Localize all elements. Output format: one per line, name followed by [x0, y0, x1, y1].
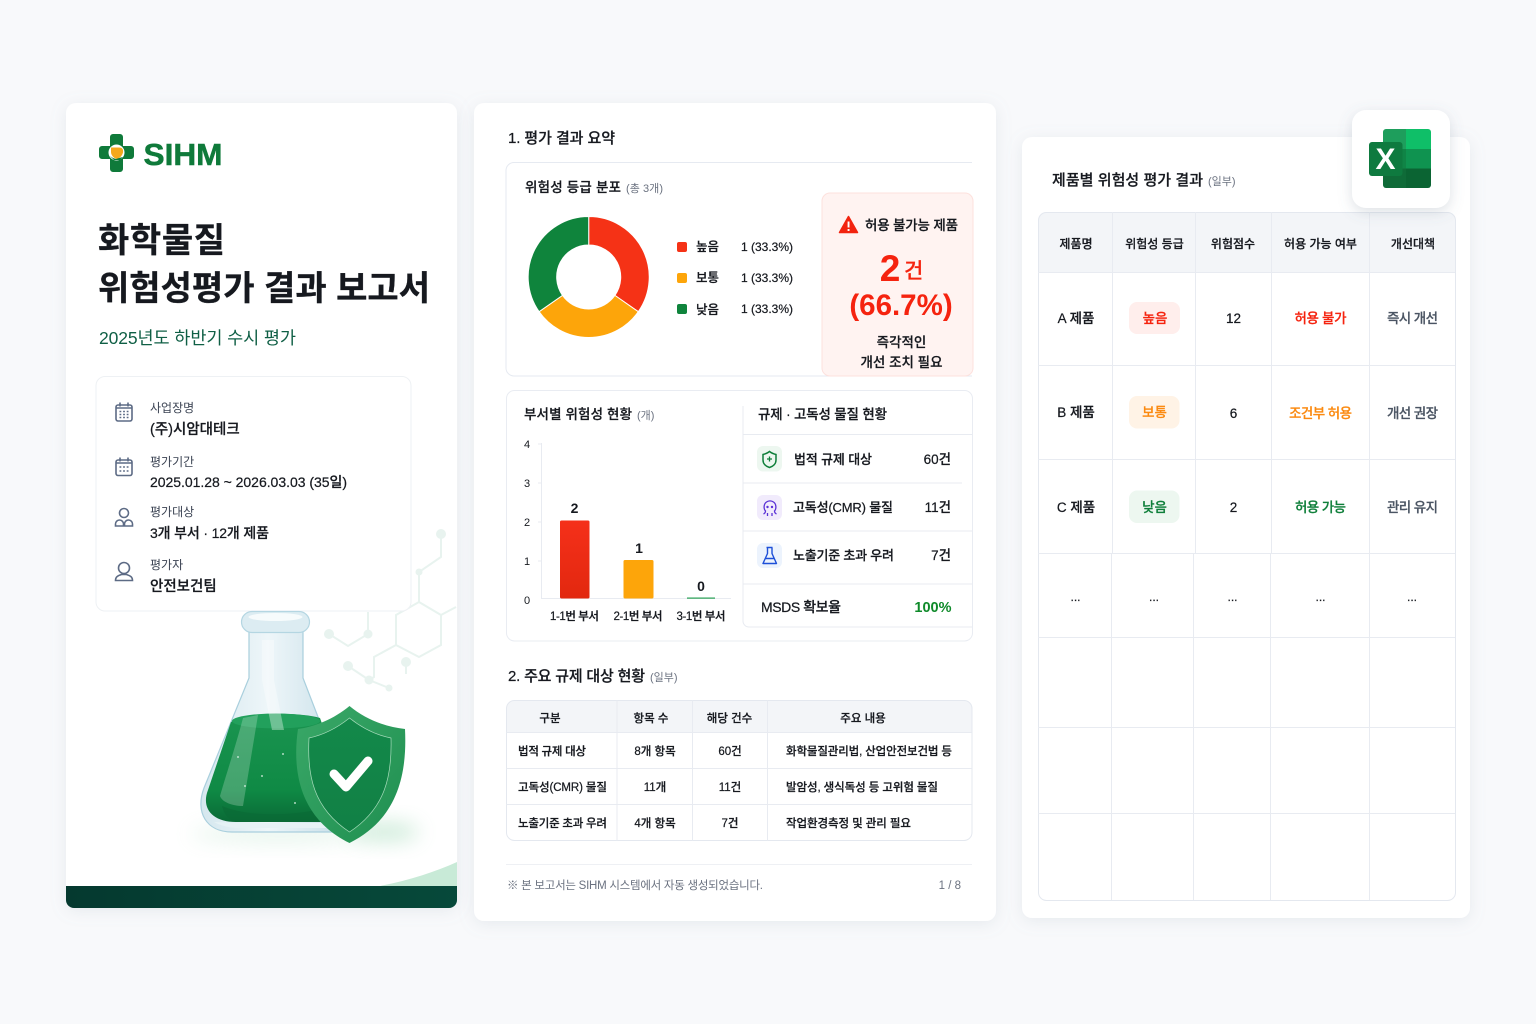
field: target: 평가대상 — [150, 505, 194, 519]
field: company — [150, 401, 240, 438]
icon: company — [116, 402, 132, 421]
table header: 제품명 — [1059, 237, 1093, 251]
row: product C: 낮음 — [1142, 500, 1167, 515]
field: period: 2025.01.28 ~ 2026.03.03 (35일) — [150, 474, 347, 490]
row: CMR substances: 고독성(CMR) 물질 — [793, 500, 893, 515]
legend: 1 (33.3%) — [741, 302, 793, 316]
field: evaluator: 안전보건팀 — [150, 578, 217, 595]
row: legally regulated: 60건 — [924, 452, 951, 467]
table header: 주요 내용 — [840, 712, 886, 725]
callout: not acceptable products: 허용 불가능 제품 — [865, 218, 958, 233]
row: ellipsis: ... — [1070, 590, 1081, 604]
logo: SIHM: SIHM — [144, 137, 222, 172]
row: CMR: 11개 — [644, 780, 666, 794]
row: product C: C 제품 — [1057, 500, 1095, 515]
legend: 1 (33.3%) — [741, 240, 793, 254]
row: product B: 조건부 허용 — [1289, 406, 1352, 421]
panel: regulated and toxic substances: 규제 · 고독성 물질 현황 — [758, 407, 887, 422]
field: period: 평가기간 — [150, 455, 194, 469]
table: product results — [1038, 212, 1456, 900]
row: product B: 6 — [1230, 406, 1237, 421]
table header: 허용 가능 여부 — [1284, 237, 1357, 251]
row: product C: 관리 유지 — [1387, 500, 1438, 515]
donut chart — [528, 216, 649, 338]
shield — [296, 706, 405, 843]
row: CMR substances — [757, 495, 951, 520]
chart heading: 부서별 위험성 현황 — [524, 407, 632, 422]
bar chart: 4 — [524, 439, 530, 451]
heading: section 1: 1. 평가 결과 요약 — [508, 130, 615, 147]
row: legally regulated — [757, 446, 951, 472]
panel: regulated and toxic substances — [743, 406, 972, 627]
row: exposure: 작업환경측정 및 관리 필요 — [786, 817, 911, 830]
icon: period — [116, 458, 132, 476]
row: CMR — [518, 780, 938, 794]
bar chart — [524, 439, 731, 623]
row: exposure: 7건 — [722, 817, 738, 830]
panel: department and regulation status — [506, 390, 972, 641]
subtitle: 2025년도 하반기 수시 평가 — [99, 328, 296, 348]
panel: product risk results — [1022, 137, 1470, 918]
check mark — [334, 761, 368, 787]
chart heading: 위험성 등급 분포 — [525, 180, 621, 195]
callout: not acceptable products: 건 — [904, 260, 923, 283]
row: exposure — [518, 816, 911, 830]
footer band — [66, 862, 457, 908]
footer note: 1 / 8 — [939, 880, 961, 892]
flask — [201, 612, 350, 832]
callout: not acceptable products: 개선 조치 필요 — [860, 355, 943, 370]
field: company: (주)시암대테크 — [150, 421, 240, 438]
row: ellipsis: ... — [1149, 590, 1159, 604]
row: exposure: 4개 항목 — [634, 816, 676, 830]
bar chart: 1 — [524, 556, 530, 568]
table header: 해당 건수 — [707, 712, 753, 725]
logo: SIHM — [99, 134, 222, 172]
footer note — [506, 864, 972, 892]
bar chart: 1-1번 부서 — [550, 610, 599, 623]
panel: summary report page — [474, 103, 996, 921]
row: product C: 허용 가능 — [1295, 500, 1346, 515]
bar chart: 2 — [524, 517, 530, 529]
field: evaluator — [150, 558, 217, 595]
row: legal — [518, 744, 952, 758]
table header: 항목 수 — [634, 712, 669, 725]
field: evaluator: 평가자 — [150, 558, 183, 572]
heading: section 2: 2. 주요 규제 대상 현황 — [508, 668, 645, 685]
row: product A: 높음 — [1143, 311, 1167, 326]
row: product C: 2 — [1230, 500, 1237, 515]
row: product A — [1058, 302, 1438, 334]
legend — [677, 240, 793, 317]
callout: not acceptable products: 즉각적인 — [877, 335, 926, 350]
illustration: flask and shield — [190, 612, 419, 843]
bar chart: 1 — [635, 540, 643, 556]
bar chart: 2-1번 부서 — [614, 610, 662, 623]
row: CMR: 11건 — [719, 781, 741, 794]
row: product C — [1057, 490, 1438, 523]
field: target — [150, 505, 269, 541]
row: MSDS rate: MSDS 확보율 — [761, 599, 841, 615]
row: legal: 법적 규제 대상 — [518, 744, 586, 758]
legend: 높음 — [696, 240, 719, 254]
legend: 보통 — [696, 271, 719, 285]
row: exposure limit: 7건 — [931, 548, 951, 563]
callout: not acceptable products: 2 — [880, 248, 900, 289]
heading: section 2: (일부) — [650, 670, 678, 684]
title — [98, 222, 430, 308]
table header — [539, 712, 886, 725]
row: CMR substances: 11건 — [925, 500, 951, 515]
icon: Excel: X — [1375, 143, 1396, 176]
row: product A: 즉시 개선 — [1387, 311, 1438, 326]
row: product A: A 제품 — [1058, 311, 1094, 326]
row: legal: 화학물질관리법, 산업안전보건법 등 — [786, 745, 952, 758]
chart heading: (개) — [637, 409, 654, 422]
icon: target — [116, 508, 132, 526]
callout: not acceptable products: (66.7%) — [849, 289, 953, 322]
table header: 구분 — [539, 712, 561, 725]
row: product A: 허용 불가 — [1294, 311, 1347, 326]
title: 화학물질 — [98, 222, 225, 260]
row: product A: 12 — [1226, 311, 1241, 326]
table header: 개선대책 — [1391, 236, 1435, 251]
row: product B: 개선 권장 — [1387, 406, 1438, 421]
icon: warning — [840, 216, 858, 232]
row: CMR: 발암성, 생식독성 등 고위험 물질 — [786, 780, 938, 794]
bar chart: 3-1번 부서 — [676, 610, 726, 623]
molecule pattern — [324, 529, 456, 692]
icon: evaluator — [116, 562, 132, 580]
legend: 낮음 — [696, 303, 719, 317]
bar chart: 0 — [697, 578, 705, 594]
chart heading: (총 3개) — [626, 182, 663, 195]
table header: 위험성 등급 — [1125, 236, 1184, 251]
panel: risk grade distribution — [506, 162, 973, 376]
row: product B: 보통 — [1142, 405, 1167, 420]
bar chart: 3 — [524, 478, 530, 490]
row: exposure limit — [757, 543, 951, 568]
row: ellipsis: ... — [1315, 590, 1326, 604]
callout: not acceptable products — [822, 193, 973, 376]
row: legal: 8개 항목 — [634, 744, 676, 758]
row: exposure limit: 노출기준 초과 우려 — [793, 548, 894, 563]
row: product B: B 제품 — [1057, 405, 1095, 420]
legend: 1 (33.3%) — [741, 271, 793, 285]
heading: 제품별 위험성 평가 결과 — [1052, 172, 1203, 189]
chart heading — [525, 180, 663, 195]
panel: report cover — [66, 103, 457, 908]
row: product B — [1057, 396, 1438, 428]
row: ellipsis — [1070, 590, 1417, 604]
field: target: 3개 부서 · 12개 제품 — [150, 525, 269, 541]
row: legally regulated: 법적 규제 대상 — [794, 452, 872, 467]
row: CMR: 고독성(CMR) 물질 — [518, 781, 607, 794]
table: regulation status — [506, 700, 972, 840]
footer note: ※ 본 보고서는 SIHM 시스템에서 자동 생성되었습니다. — [507, 879, 763, 892]
table header: 위험점수 — [1211, 236, 1255, 251]
row: ellipsis: ... — [1407, 590, 1417, 604]
row: MSDS rate: 100% — [914, 600, 952, 616]
row: MSDS rate — [761, 599, 952, 616]
table header — [1059, 236, 1435, 251]
field: company: 사업장명 — [150, 401, 194, 415]
bar chart: 0 — [524, 595, 530, 607]
row: ellipsis: ... — [1227, 590, 1238, 604]
field: period — [150, 455, 347, 490]
row: legal: 60건 — [718, 745, 742, 758]
row: exposure: 노출기준 초과 우려 — [518, 817, 607, 830]
icon: Excel — [1352, 110, 1450, 208]
heading: (일부) — [1208, 174, 1236, 188]
info box — [96, 376, 411, 611]
title: 위험성평가 결과 보고서 — [98, 270, 430, 308]
bar chart: 2 — [571, 500, 579, 516]
